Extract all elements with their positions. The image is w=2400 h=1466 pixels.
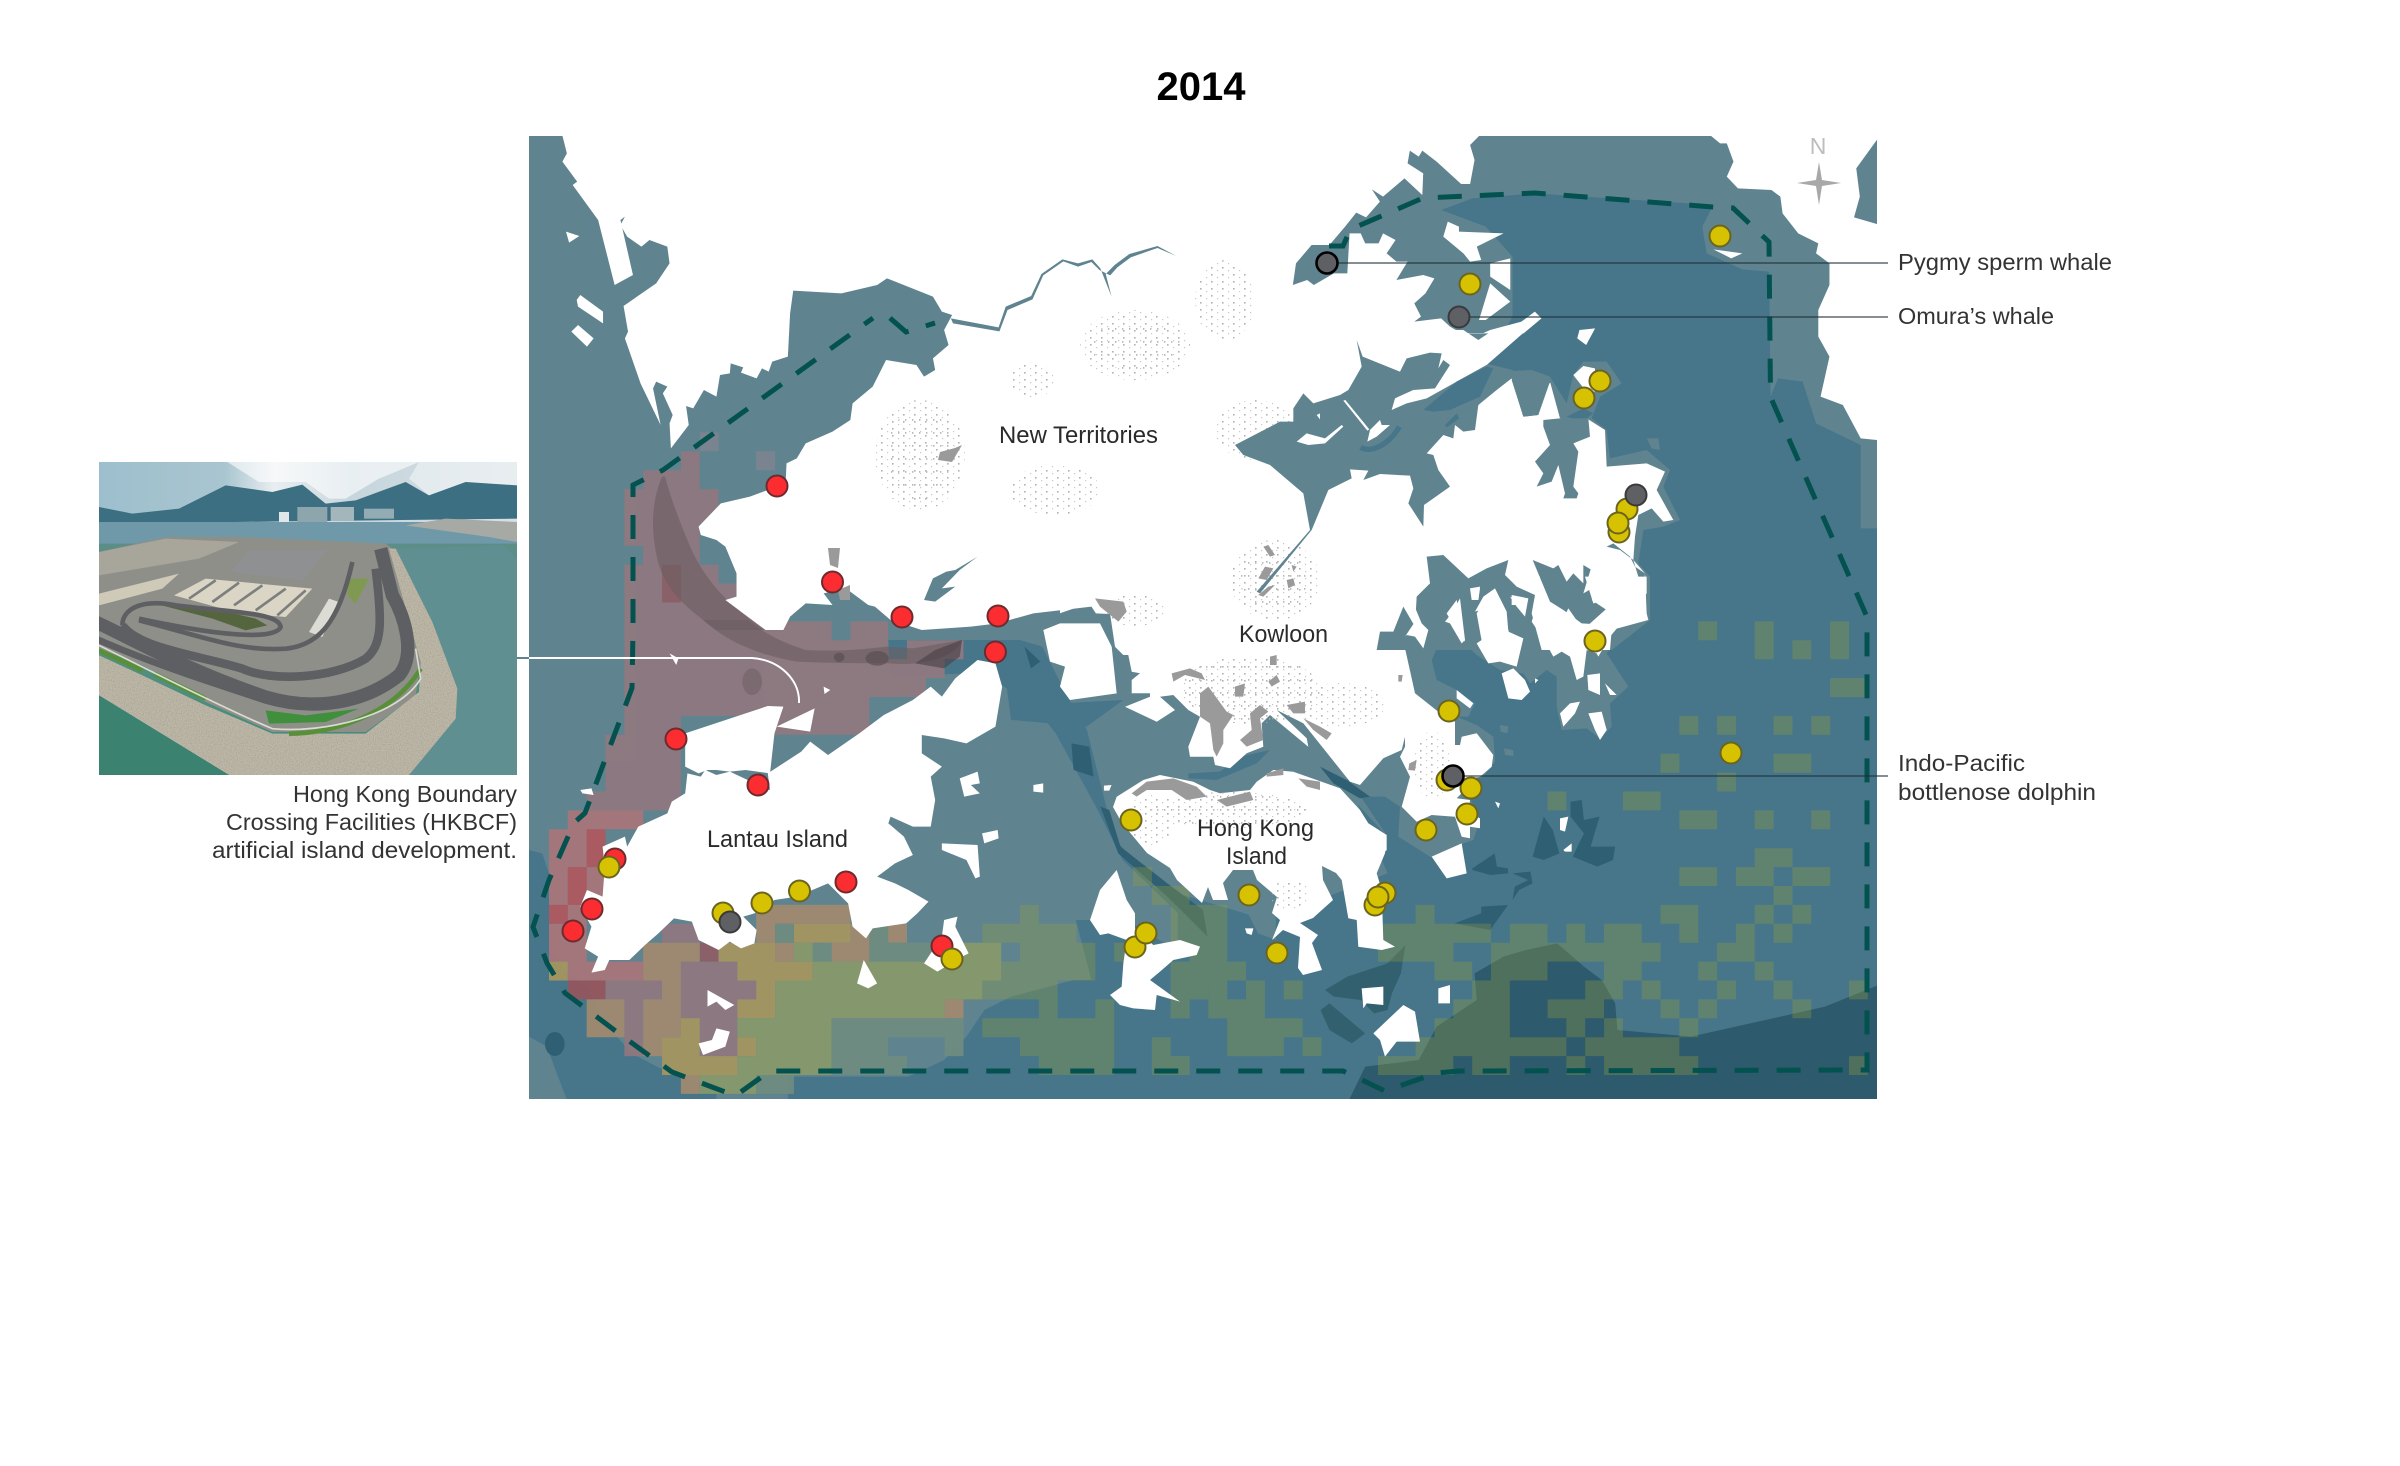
islands: south waters <box>1090 870 1450 1057</box>
leader line: Indo-Pacific bottlenose dolphin <box>1453 775 1888 777</box>
photo caption: Crossing Facilities (HKBCF) <box>226 809 517 835</box>
shallow halo around Sai Kung <box>1514 362 1680 650</box>
compass <box>1797 133 1841 205</box>
river and sea inlets <box>924 246 1645 650</box>
urban building footprints (dots) <box>875 260 1450 910</box>
place name: New Territories: New Territories <box>999 422 1158 449</box>
photo caption: artificial island development. <box>212 837 517 863</box>
species label: Indo-Pacific bottlenose dolphin: Indo-Pacific <box>1898 750 2025 776</box>
photo caption <box>212 781 517 863</box>
urban built-up areas <box>828 445 1417 807</box>
species label: Pygmy sperm whale: Pygmy sperm whale <box>1898 249 2112 275</box>
species label: Omura's whale: Omura’s whale <box>1898 303 2054 329</box>
islands: Port Shelter and Clear Water Bay <box>1380 577 1647 878</box>
photo: HKBCF artificial island <box>99 462 517 775</box>
yellow sighting markers <box>598 226 1742 970</box>
place name: Hong Kong Island: Hong Kong <box>1197 815 1314 842</box>
leader line: Pygmy sperm whale <box>1327 262 1888 264</box>
Tolo Harbour and Sai Kung bays <box>1235 340 1645 650</box>
deep water layers <box>529 193 1883 1103</box>
title: 2014 <box>1157 65 1246 109</box>
place name: Lantau Island: Lantau Island <box>707 826 848 853</box>
red sighting markers <box>562 476 1008 956</box>
map <box>529 123 1883 1103</box>
place name: Hong Kong Island: Island <box>1226 843 1287 870</box>
species label: Indo-Pacific bottlenose dolphin: bottlenose dolphin <box>1898 779 2096 805</box>
HKBCF impact area grid <box>549 432 1001 1094</box>
maritime boundary dashed line <box>533 193 1867 1095</box>
land: north-east coast <box>1234 136 1877 440</box>
place name: Kowloon: Kowloon <box>1239 621 1328 648</box>
compass: N <box>1810 133 1826 159</box>
marine sightings density grid <box>982 621 1868 1075</box>
land masses <box>559 123 1883 1055</box>
connector tick beside photo <box>517 657 529 659</box>
land: north-west and New Territories <box>559 123 1234 630</box>
land: Sai Kung <box>1213 330 1673 650</box>
connector line to HKBCF photo <box>529 658 799 703</box>
leader line: Omura's whale <box>1459 316 1888 318</box>
grey sighting markers <box>720 252 1646 932</box>
photo caption: Hong Kong Boundary <box>293 781 517 807</box>
place name: Hong Kong Island <box>1197 815 1314 870</box>
land: Tsing Yi <box>1043 623 1117 700</box>
land: Kowloon and Clear Water Bay <box>1060 600 1493 838</box>
land: Lantau and airport <box>580 653 1112 1055</box>
land: Hong Kong Island <box>1113 770 1395 975</box>
species label: Indo-Pacific bottlenose dolphin <box>1898 750 2096 805</box>
shallow halo around Port Shelter islands <box>1380 650 1628 858</box>
reclamation footprint shading <box>653 477 962 695</box>
